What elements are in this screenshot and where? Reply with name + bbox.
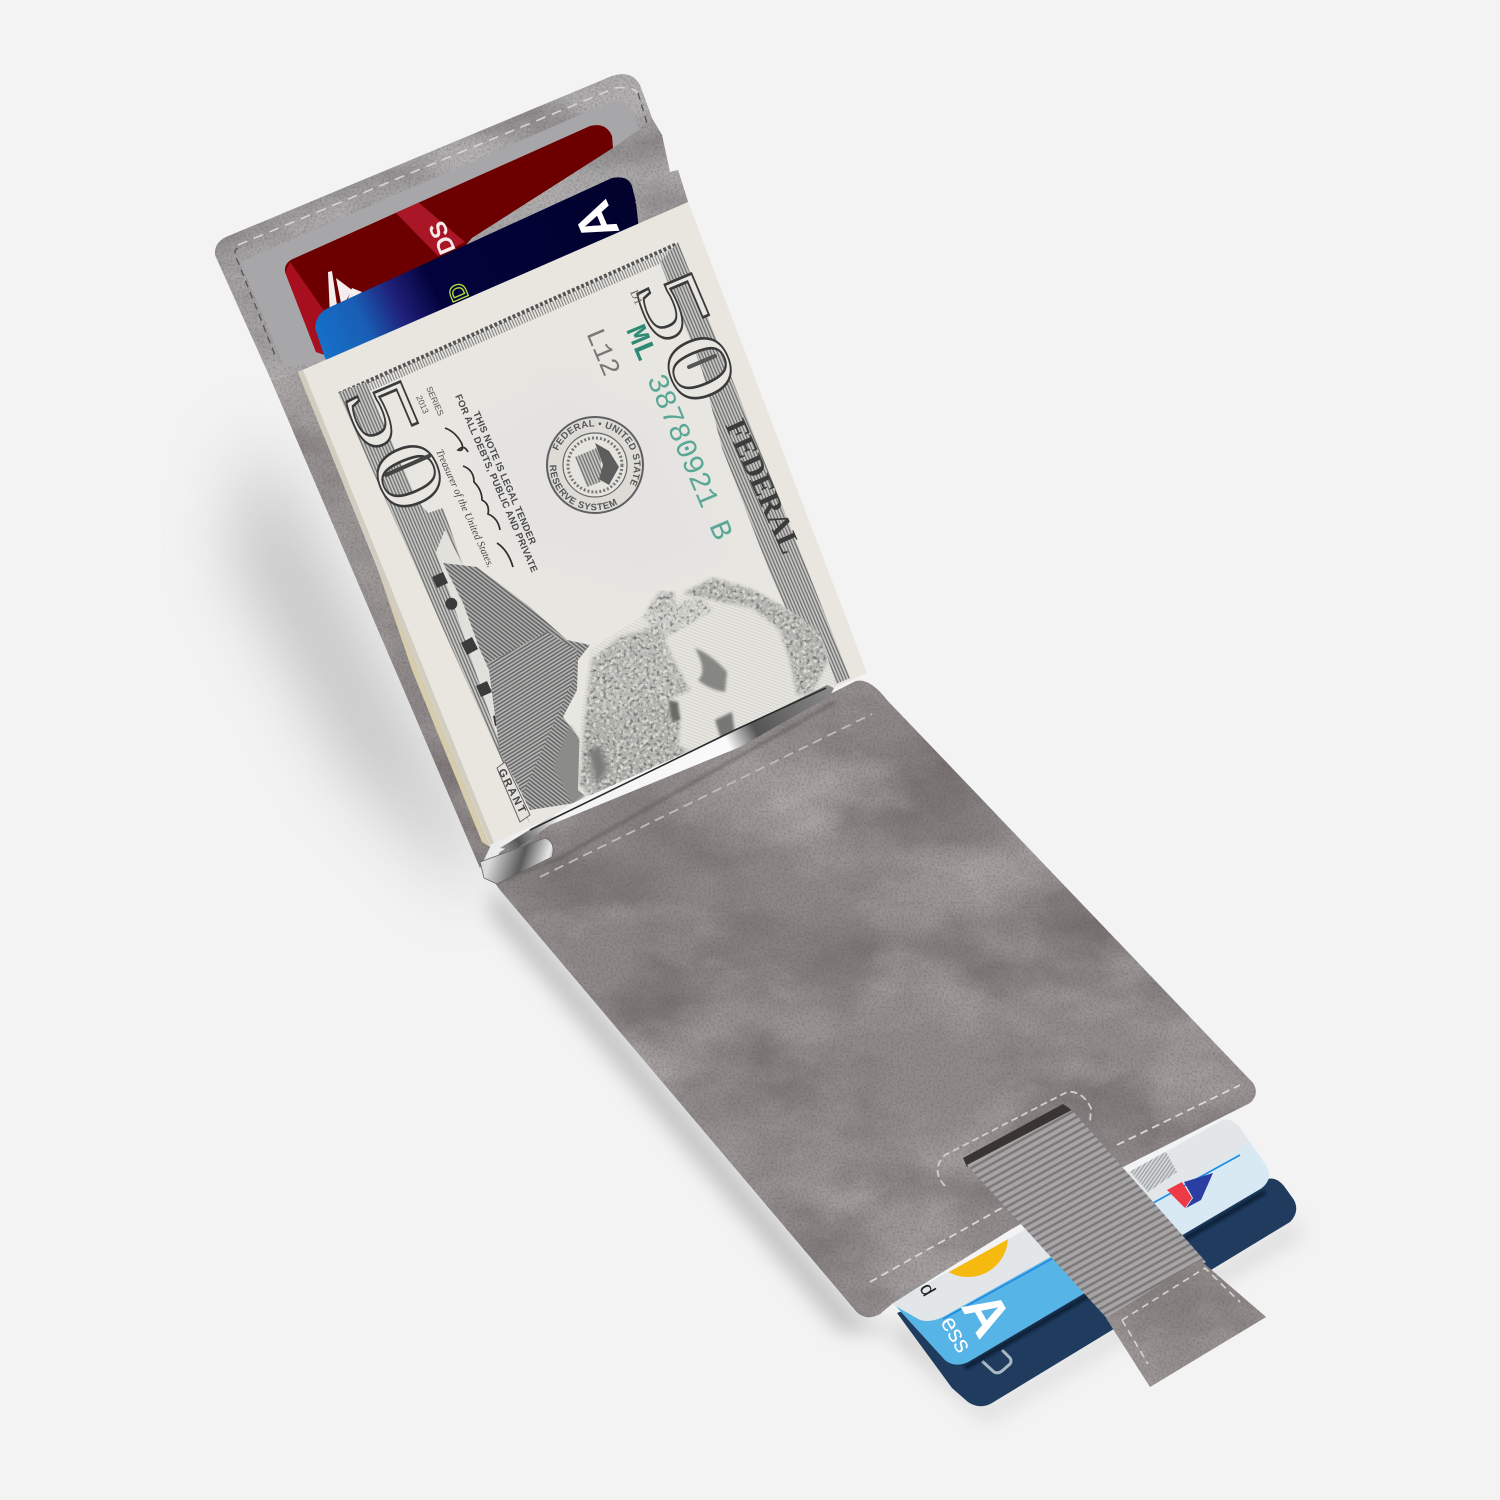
left numeral slit — [386, 456, 429, 475]
hair — [683, 578, 828, 695]
side stitching — [235, 93, 647, 355]
bill face — [338, 242, 850, 824]
top stitching — [238, 88, 638, 245]
nose shadow — [668, 700, 680, 722]
card A: A — [950, 1280, 1024, 1347]
red card edge — [285, 262, 324, 354]
paper — [298, 202, 867, 845]
clip shadow — [505, 702, 835, 880]
right numeral slit — [689, 356, 715, 367]
hologram — [1127, 1150, 1177, 1192]
flag logo red — [1167, 1182, 1192, 1208]
navy card symbol — [982, 1350, 1011, 1373]
treasurer text: Treasurer of the United States. — [433, 448, 496, 570]
clip barrel — [480, 838, 553, 884]
GRANT label — [495, 762, 530, 822]
red card logo — [328, 271, 362, 308]
red card lettering: DS — [424, 217, 462, 258]
blue card A: A — [563, 193, 631, 250]
blue card — [315, 177, 638, 360]
top border scallops — [339, 244, 677, 394]
inner lining — [240, 101, 646, 368]
faint watermark — [460, 370, 730, 590]
top engraved border — [368, 249, 672, 391]
lapel — [488, 632, 577, 793]
money clip — [480, 685, 835, 884]
left engraved band — [338, 382, 530, 824]
drop shadow — [235, 430, 1300, 1420]
band ornaments — [432, 572, 496, 726]
card edge shadow — [965, 1192, 1265, 1368]
tab stitching — [1122, 1268, 1240, 1364]
navy card — [897, 1178, 1296, 1406]
back panel shape — [215, 74, 688, 868]
front pocket — [635, 170, 688, 226]
jacket — [443, 563, 590, 810]
card ess: ess — [935, 1312, 977, 1357]
ear — [647, 592, 675, 618]
federal reserve seal — [546, 416, 644, 514]
seal lower lettering: RESERVE SYSTEM — [550, 465, 618, 510]
check letter: D1 — [627, 288, 646, 307]
blue divider line — [943, 1155, 1240, 1319]
light card — [880, 1100, 1280, 1380]
silver panel — [885, 1110, 1262, 1321]
portrait of Grant — [443, 563, 836, 810]
ornament strip — [436, 530, 498, 738]
panel: back wallet leather — [215, 74, 688, 868]
hinge stitching — [540, 714, 872, 877]
clip blade — [500, 685, 834, 850]
product photo: money clip wallet — [208, 74, 1300, 1421]
lower beard — [580, 700, 690, 800]
pull strap — [967, 1110, 1266, 1387]
seal lettering: FEDERAL • UNITED STATES — [552, 420, 641, 486]
collar — [553, 725, 592, 805]
yellow emblem — [928, 1197, 1008, 1277]
leather tab — [1106, 1260, 1266, 1387]
blue card D: D — [443, 279, 475, 305]
seal shield — [575, 447, 603, 487]
left numeral 50: 50 — [324, 363, 468, 527]
legal tender second line: FOR ALL DEBTS, PUBLIC AND PRIVATE — [452, 393, 540, 575]
page edges — [378, 570, 490, 847]
seal eagle — [595, 443, 619, 485]
panel: front flap leather — [490, 681, 1256, 1317]
face — [578, 578, 836, 800]
beard shadow — [588, 745, 608, 785]
series year: 2013 — [414, 394, 431, 415]
red card — [284, 125, 613, 355]
red card stripe — [395, 202, 465, 256]
hairline — [643, 598, 712, 640]
eye — [695, 648, 727, 692]
lower eye — [715, 712, 735, 742]
legal tender text: THIS NOTE IS LEGAL TENDER — [470, 410, 538, 546]
cyan band — [880, 1230, 1100, 1372]
lower stitching — [870, 1085, 1240, 1282]
paper rim — [298, 370, 494, 845]
clip ridge — [530, 688, 826, 830]
GRANT text: GRANT — [495, 767, 528, 815]
flag logo blue — [1184, 1173, 1213, 1208]
plate number: L12 — [578, 325, 624, 381]
right engraved band — [660, 242, 850, 690]
flap surface — [490, 681, 1256, 1317]
signature — [445, 428, 513, 567]
card d: d — [915, 1280, 939, 1300]
serial number: ML 38780921 B — [618, 320, 739, 545]
upper beard — [585, 625, 690, 725]
right numeral 50: 50 — [615, 255, 759, 419]
ribbon — [967, 1110, 1206, 1324]
strap slot — [963, 1104, 1073, 1167]
slot stitching — [938, 1092, 1091, 1186]
series: SERIES — [424, 385, 446, 418]
bottom cards — [880, 1100, 1296, 1406]
middle pocket — [400, 120, 670, 320]
left pocket strip — [272, 372, 490, 868]
banknote stack — [298, 202, 867, 847]
FEDERAL lettering: FEDERAL — [719, 414, 807, 559]
